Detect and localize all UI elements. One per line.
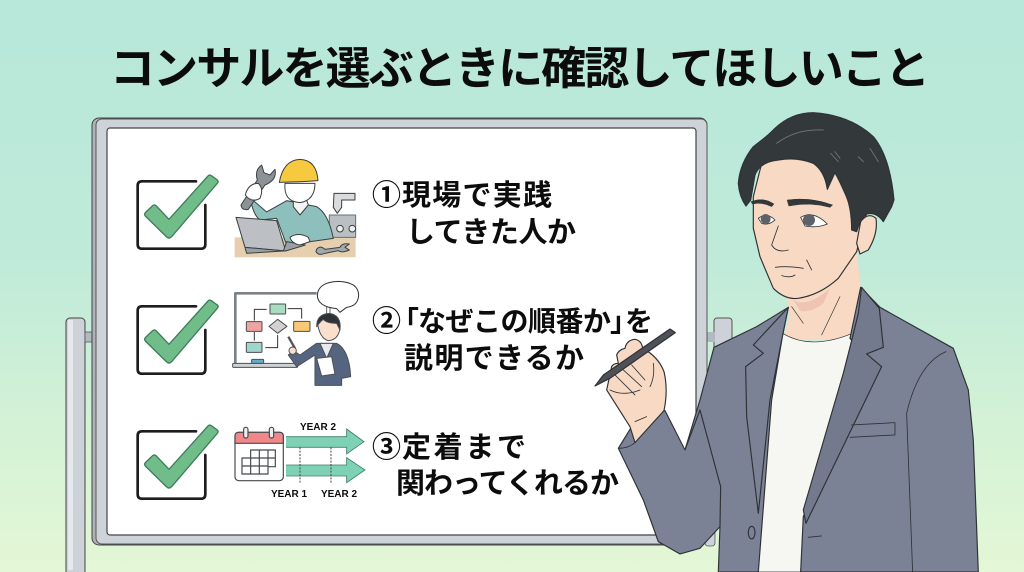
- icon: calendar with year arrows: YEAR 1: [271, 489, 307, 500]
- item 1 text: してきた人か: [406, 217, 576, 249]
- calendar: [235, 427, 283, 481]
- item 2 text: を: [625, 306, 653, 337]
- whiteboard right stand: [705, 318, 732, 546]
- right lapel: [803, 287, 883, 523]
- icon: presenter with flowchart: [233, 281, 359, 385]
- whiteboard left stand: [66, 318, 94, 572]
- checkbox 1: [138, 175, 218, 249]
- neck: [783, 250, 861, 340]
- icon: worker at laptop: [235, 159, 356, 257]
- icon: calendar with year arrows: YEAR 2: [321, 489, 357, 500]
- hand: [607, 339, 666, 443]
- year arrows: [286, 429, 365, 483]
- whiteboard: [66, 118, 732, 572]
- hair highlights: [777, 130, 878, 162]
- item 3 text: 定着まで: [402, 431, 526, 464]
- item 2 text: [372, 305, 653, 375]
- whiteboard surface: [107, 128, 696, 535]
- fingers: [610, 363, 654, 422]
- item 2 text: 」: [610, 306, 638, 337]
- item 2 text: なぜこの順番か: [418, 306, 611, 337]
- item 3 text: [372, 431, 619, 500]
- item 2 text: ②: [372, 305, 401, 338]
- item 3 text: ③: [372, 431, 401, 464]
- flowchart: [246, 304, 310, 352]
- left lapel: [746, 307, 788, 513]
- icon: calendar with year arrows: YEAR 2: [300, 422, 336, 433]
- item 1 text: ①: [372, 179, 401, 212]
- nose and mouth: [772, 226, 812, 277]
- eyes: [758, 215, 775, 224]
- eyebrows: [751, 199, 833, 207]
- item 2 text: 「: [391, 306, 419, 337]
- item 2 text: 説明できるか: [404, 342, 584, 375]
- jacket: [685, 287, 978, 572]
- item 1 text: 現場で実践: [402, 179, 552, 212]
- pen: [595, 329, 675, 386]
- whiteboard frame: [92, 118, 707, 545]
- item 1 text: [372, 179, 576, 249]
- ear: [857, 216, 876, 254]
- checkbox 3: [138, 425, 218, 499]
- checkbox 2: [138, 300, 218, 374]
- person: [595, 113, 978, 572]
- t-shirt: [758, 333, 867, 572]
- sleeve: [618, 410, 721, 554]
- item 3 text: 関わってくれるか: [396, 468, 619, 500]
- title: コンサルを選ぶときに確認してほしいこと: [110, 43, 930, 94]
- icon: calendar with year arrows: [235, 422, 365, 500]
- hair: [738, 113, 894, 232]
- head: [753, 157, 867, 299]
